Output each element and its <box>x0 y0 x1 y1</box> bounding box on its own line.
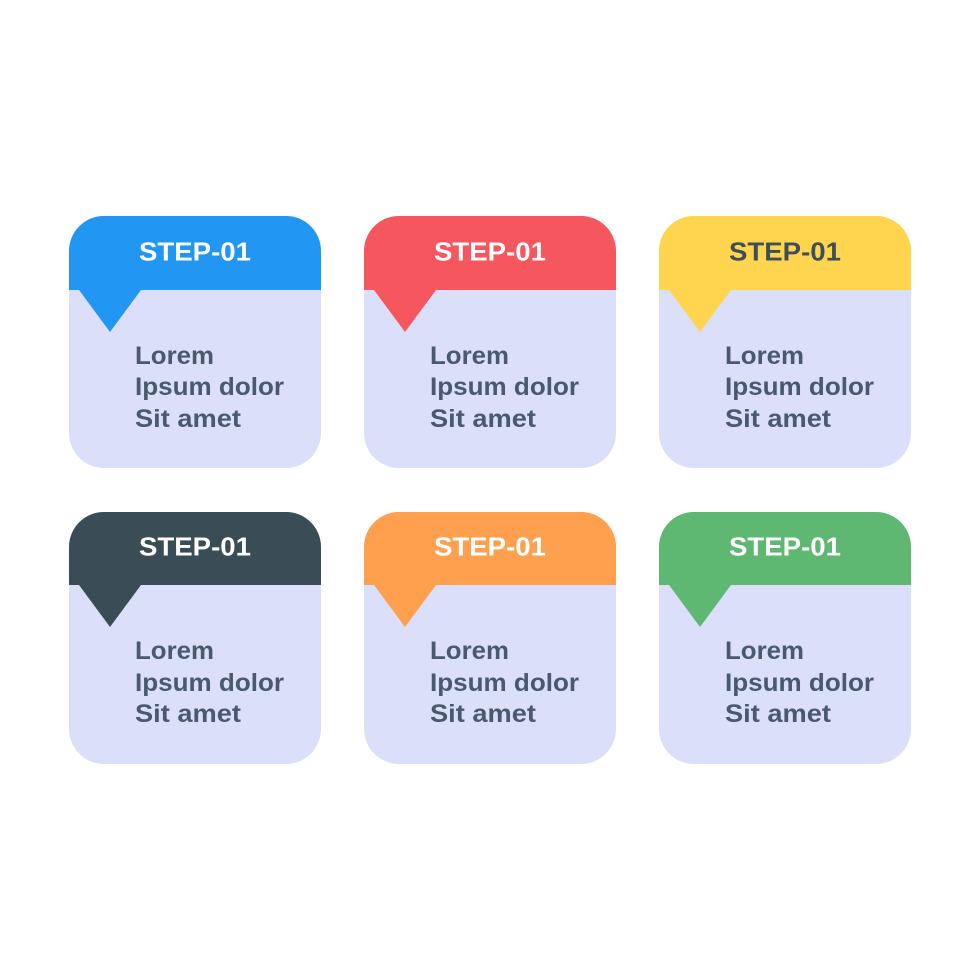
header: red <box>364 216 616 332</box>
card: yellow step <box>659 216 911 468</box>
text block: red: Ipsum dolor <box>430 373 579 401</box>
card: red step <box>364 216 616 468</box>
text block: orange: Ipsum dolor <box>430 669 579 697</box>
text block: green <box>725 637 874 728</box>
heading: green step: STEP-01 <box>729 532 841 562</box>
card: orange step <box>364 512 616 764</box>
text block: green: Ipsum dolor <box>725 669 874 697</box>
header: yellow <box>659 216 911 332</box>
text block: red: Sit amet <box>430 405 537 433</box>
text block: yellow <box>725 342 874 433</box>
header: dark <box>69 512 321 627</box>
text block: dark: Lorem <box>135 637 214 665</box>
text block: yellow: Ipsum dolor <box>725 373 874 401</box>
header: blue <box>69 216 321 332</box>
card: blue step <box>69 216 321 468</box>
card: green step <box>659 512 911 764</box>
text block: red <box>430 342 579 433</box>
text block: yellow: Lorem <box>725 342 804 370</box>
text block: blue: Ipsum dolor <box>135 373 284 401</box>
text block: orange: Sit amet <box>430 700 537 728</box>
text block: dark: Ipsum dolor <box>135 669 284 697</box>
header: orange <box>364 512 616 627</box>
heading: yellow step: STEP-01 <box>729 236 841 266</box>
heading: red step: STEP-01 <box>434 236 546 266</box>
text block: yellow: Sit amet <box>725 405 832 433</box>
text block: dark: Sit amet <box>135 700 242 728</box>
text block: green: Sit amet <box>725 700 832 728</box>
text block: orange: Lorem <box>430 637 509 665</box>
text block: green: Lorem <box>725 637 804 665</box>
text block: dark <box>135 637 284 728</box>
card: dark step <box>69 512 321 764</box>
text block: blue: Lorem <box>135 342 214 370</box>
text block: red: Lorem <box>430 342 509 370</box>
text block: blue <box>135 342 284 433</box>
text block: orange <box>430 637 579 728</box>
text block: blue: Sit amet <box>135 405 242 433</box>
header: green <box>659 512 911 627</box>
heading: dark step: STEP-01 <box>139 532 251 562</box>
heading: blue step: STEP-01 <box>139 236 251 266</box>
heading: orange step: STEP-01 <box>434 532 546 562</box>
